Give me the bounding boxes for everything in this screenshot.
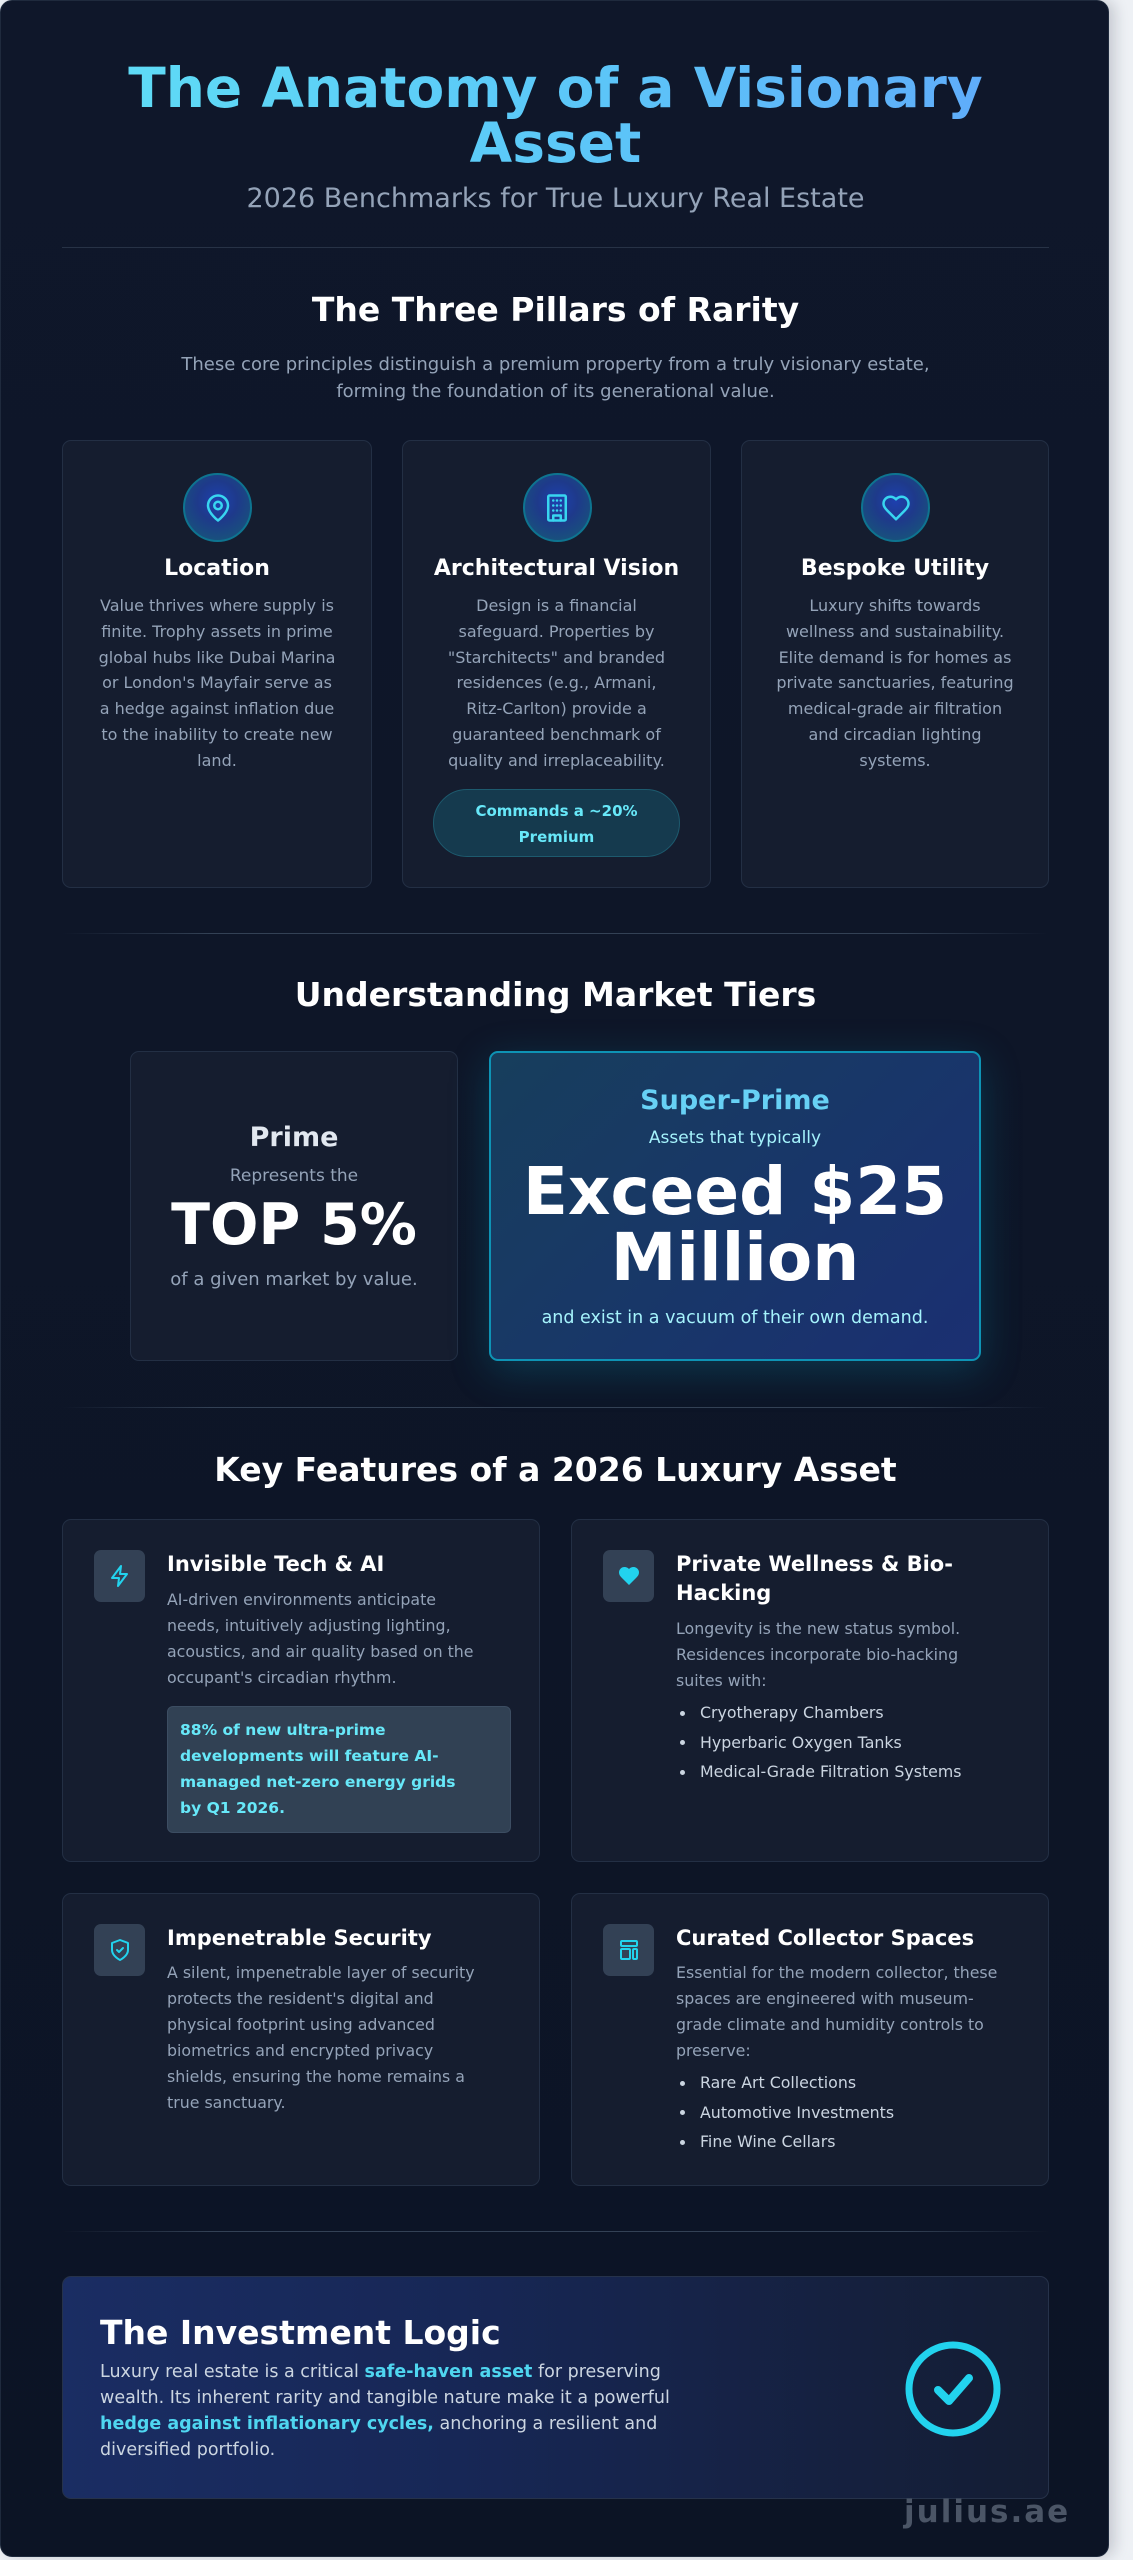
panel: architectural vision: [402, 440, 711, 888]
stat: exceed $25 million: [523, 1153, 947, 1296]
panel: investment logic: [62, 2276, 1049, 2499]
panel: security: biometrics and encrypted privacy: [167, 2041, 433, 2060]
panel: collector spaces: spaces are engineered with museum-: [676, 1989, 974, 2008]
text: wellness and sustainability.: [786, 622, 1004, 641]
panel: security: A silent, impenetrable layer of security: [167, 1963, 475, 1982]
panel: wellness: Medical-Grade Filtration Systems: [700, 1762, 961, 1781]
text: safeguard. Properties by: [459, 622, 654, 641]
title: [1, 61, 1110, 171]
text: [776, 596, 1014, 770]
panel: collector spaces: [571, 1893, 1049, 2186]
panel: invisible tech: acoustics, and air quality based on the: [167, 1642, 474, 1661]
panel: security: protects the resident's digital and: [167, 1989, 434, 2008]
text: a hedge against inflation due: [100, 699, 334, 718]
panel: collector spaces: grade climate and humidity controls to: [676, 2015, 984, 2034]
panel: security: shields, ensuring the home remains a: [167, 2067, 465, 2086]
panel: wellness: Hyperbaric Oxygen Tanks: [700, 1732, 902, 1752]
icon: heart: [603, 1550, 654, 1602]
text: systems.: [859, 751, 931, 770]
panel: collector spaces: Essential for the modern collector, these: [676, 1963, 997, 1982]
heading: key features: Key Features of a 2026 Luxury Asset: [214, 1450, 897, 1489]
text: hedge against inflationary cycles, anchoring a resilient and: [100, 2414, 657, 2434]
callout: stat: [167, 1706, 511, 1833]
panel: prime: Prime: [250, 1122, 338, 1153]
callout: premium: [433, 789, 680, 857]
panel: wellness: suites with:: [676, 1671, 767, 1690]
panel: security: physical footprint using advanced: [167, 2015, 435, 2034]
callout: stat: developments will feature AI-: [180, 1747, 439, 1765]
icon: building: [522, 473, 592, 542]
panel: wellness: Residences incorporate bio-hacking: [676, 1645, 958, 1664]
text: Ritz-Carlton) provide a: [466, 699, 647, 718]
panel: wellness: [571, 1519, 1049, 1862]
panel: security: Impenetrable Security: [167, 1926, 432, 1950]
panel: wellness: Longevity is the new status symbol.: [676, 1619, 960, 1638]
text: Luxury shifts towards: [809, 596, 981, 615]
text: and circadian lighting: [808, 725, 982, 744]
text: land.: [197, 751, 237, 770]
title: The Anatomy of a Visionary: [128, 56, 983, 120]
panel: security: true sanctuary.: [167, 2093, 286, 2112]
panel: collector spaces: Automotive Investments: [700, 2102, 894, 2122]
panel: wellness: Cryotherapy Chambers: [700, 1703, 884, 1722]
title: Bespoke Utility: [801, 556, 989, 581]
icon: pin: [183, 473, 252, 542]
callout: stat: managed net-zero energy grids: [180, 1773, 456, 1791]
text: Value thrives where supply is: [100, 596, 334, 615]
stat: top 5%: TOP 5%: [171, 1192, 417, 1258]
text: [100, 2362, 670, 2460]
panel: invisible tech: needs, intuitively adjusting lighting,: [167, 1616, 451, 1635]
panel: prime: of a given market by value.: [170, 1269, 418, 1290]
stat: exceed $25 million: Million: [611, 1219, 859, 1296]
text: to the inability to create new: [101, 725, 333, 744]
icon: bolt: [94, 1550, 145, 1602]
panel: super-prime: Assets that typically: [649, 1128, 821, 1148]
heading: The Investment Logic: [100, 2313, 501, 2352]
stat: exceed $25 million: Exceed $25: [523, 1153, 947, 1230]
text: Luxury real estate is a critical safe-haven asset for preserving: [100, 2362, 661, 2382]
callout: stat: by Q1 2026.: [180, 1799, 285, 1817]
text: global hubs like Dubai Marina: [99, 648, 335, 667]
text: diversified portfolio.: [100, 2440, 275, 2460]
text: [99, 596, 335, 770]
panel: invisible tech: Invisible Tech & AI: [167, 1552, 384, 1576]
panel: super-prime: Super-Prime: [640, 1085, 830, 1116]
text: or London's Mayfair serve as: [102, 673, 332, 692]
panel: invisible tech: AI-driven environments anticipate: [167, 1590, 436, 1609]
text: [448, 596, 665, 770]
pillars intro: forming the foundation of its generational value.: [336, 381, 775, 402]
text: wealth. Its inherent rarity and tangible nature make it a powerful: [100, 2388, 670, 2408]
text: private sanctuaries, featuring: [776, 673, 1014, 692]
heading: pillars: The Three Pillars of Rarity: [312, 290, 799, 329]
text: quality and irreplaceability.: [448, 751, 665, 770]
pillars intro: [181, 354, 930, 402]
text: guaranteed benchmark of: [452, 725, 661, 744]
panel: prime: [130, 1051, 458, 1361]
icon: heart: [861, 473, 930, 542]
panel: security: [62, 1893, 540, 2186]
panel: prime: Represents the: [230, 1166, 358, 1186]
panel: invisible tech: occupant's circadian rhythm.: [167, 1668, 396, 1687]
pillars intro: These core principles distinguish a premium property from a truly visionary estate,: [181, 354, 930, 375]
text: finite. Trophy assets in prime: [101, 622, 333, 641]
text: "Starchitects" and branded: [448, 648, 665, 667]
subtitle: 2026 Benchmarks for True Luxury Real Estate: [246, 183, 865, 214]
callout: stat: 88% of new ultra-prime: [180, 1721, 386, 1739]
icon: check circle: [906, 2342, 1000, 2436]
text: medical-grade air filtration: [788, 699, 1002, 718]
panel: location: [62, 440, 372, 888]
heading: market tiers: Understanding Market Tiers: [295, 975, 816, 1014]
panel: super-prime: [489, 1051, 981, 1361]
text: Design is a financial: [476, 596, 637, 615]
panel: wellness: Private Wellness & Bio-: [676, 1552, 953, 1576]
panel: collector spaces: Curated Collector Spaces: [676, 1926, 974, 1950]
text: residences (e.g., Armani,: [457, 673, 656, 692]
icon: layout: [603, 1924, 654, 1976]
panel: invisible tech: [62, 1519, 540, 1862]
callout: premium: Commands a ~20%: [475, 802, 638, 820]
panel: bespoke utility: [741, 440, 1049, 888]
watermark: julius.ae: [904, 2494, 1070, 2530]
title: Architectural Vision: [434, 556, 679, 581]
text: Elite demand is for homes as: [779, 648, 1011, 667]
panel: wellness: Hacking: [676, 1581, 771, 1605]
title: Location: [164, 556, 270, 581]
title: Asset: [470, 111, 641, 175]
panel: collector spaces: preserve:: [676, 2041, 751, 2060]
callout: premium: Premium: [519, 828, 594, 846]
panel: super-prime: and exist in a vacuum of their own demand.: [542, 1308, 928, 1328]
panel: collector spaces: Rare Art Collections: [700, 2073, 856, 2092]
panel: collector spaces: Fine Wine Cellars: [700, 2132, 835, 2151]
icon: shield: [94, 1924, 145, 1976]
